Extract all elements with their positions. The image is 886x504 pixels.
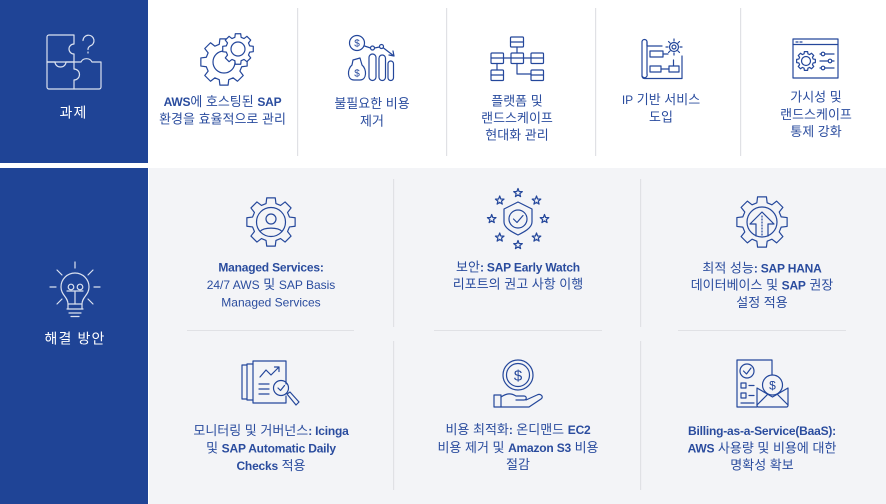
text: 최적 성능: SAP HANA (702, 261, 822, 276)
text: 설정 적용 (736, 295, 788, 310)
text: 랜드스케이프 (481, 111, 553, 126)
icon: gear with person (247, 198, 295, 246)
card: remove costs (334, 36, 410, 129)
icon: gear with up arrow (737, 197, 787, 247)
icon: blueprint with gear (642, 39, 682, 78)
card: security (453, 188, 583, 292)
text: 환경을 효율적으로 관리 (159, 112, 286, 127)
text: 불필요한 비용 (334, 96, 410, 111)
panel: challenges label (0, 0, 148, 163)
icon: gears (201, 34, 253, 85)
text: 데이터베이스 및 SAP 권장 (691, 278, 833, 293)
icon: money bag and bars: $ (354, 38, 360, 50)
text: 24/7 AWS 및 SAP Basis (207, 277, 335, 292)
heading: solutions: 해결 방안 (45, 331, 105, 347)
card: optimal performance (691, 197, 833, 310)
card: managed services (207, 198, 335, 310)
panel: solutions label (0, 168, 148, 504)
text: 가시성 및 (790, 90, 842, 105)
text: 비용 최적화: 온디맨드 EC2 (445, 422, 591, 437)
text: 플랫폼 및 (491, 94, 543, 109)
icon: network blocks (491, 37, 544, 80)
text: 랜드스케이프 (780, 107, 852, 122)
text: AWS에 호스팅된 SAP (164, 94, 281, 109)
text: 제거 (360, 114, 384, 129)
card: cost optimization (437, 360, 599, 472)
icon: bill with envelope: $ (769, 378, 776, 392)
text: Managed Services: (218, 261, 324, 275)
text: 현대화 관리 (485, 128, 549, 143)
text: Checks 적용 (236, 458, 306, 473)
text: Managed Services (221, 296, 321, 310)
card: visibility and control (780, 39, 852, 139)
icon: hand holding coin: $ (514, 368, 523, 384)
icon: hand holding coin (494, 360, 542, 407)
card: AWS SAP environment (159, 34, 286, 127)
icon: puzzle with question mark (47, 35, 101, 89)
card: platform modernization (481, 37, 553, 143)
icon: money bag and bars: $ (354, 68, 360, 80)
card: monitoring and governance (193, 361, 349, 473)
text: 통제 강화 (790, 124, 842, 139)
icon: shield and stars (487, 188, 549, 249)
text: 보안: SAP Early Watch (456, 260, 580, 275)
icon: settings window (793, 39, 838, 78)
text: Billing-as-a-Service(BaaS): (688, 424, 836, 438)
text: 및 SAP Automatic Daily (206, 441, 336, 456)
icon: report with magnifier (242, 361, 299, 405)
card: billing as a service (688, 360, 836, 473)
icon: money bag and bars (348, 36, 394, 80)
text: 절감 (506, 457, 530, 472)
panel: solutions background (149, 168, 886, 504)
text: AWS 사용량 및 비용에 대한 (688, 441, 836, 456)
icon: light bulb (50, 262, 100, 316)
text: 명확성 확보 (730, 458, 794, 473)
text: 모니터링 및 거버넌스: Icinga (193, 423, 349, 438)
text: 도입 (649, 110, 673, 125)
card: IP based services (622, 39, 700, 125)
text: 비용 제거 및 Amazon S3 비용 (437, 440, 599, 455)
icon: bill with envelope (737, 360, 788, 407)
heading: challenges: 과제 (60, 105, 87, 121)
text: 리포트의 권고 사항 이행 (453, 277, 583, 292)
text: IP 기반 서비스 (622, 92, 700, 107)
